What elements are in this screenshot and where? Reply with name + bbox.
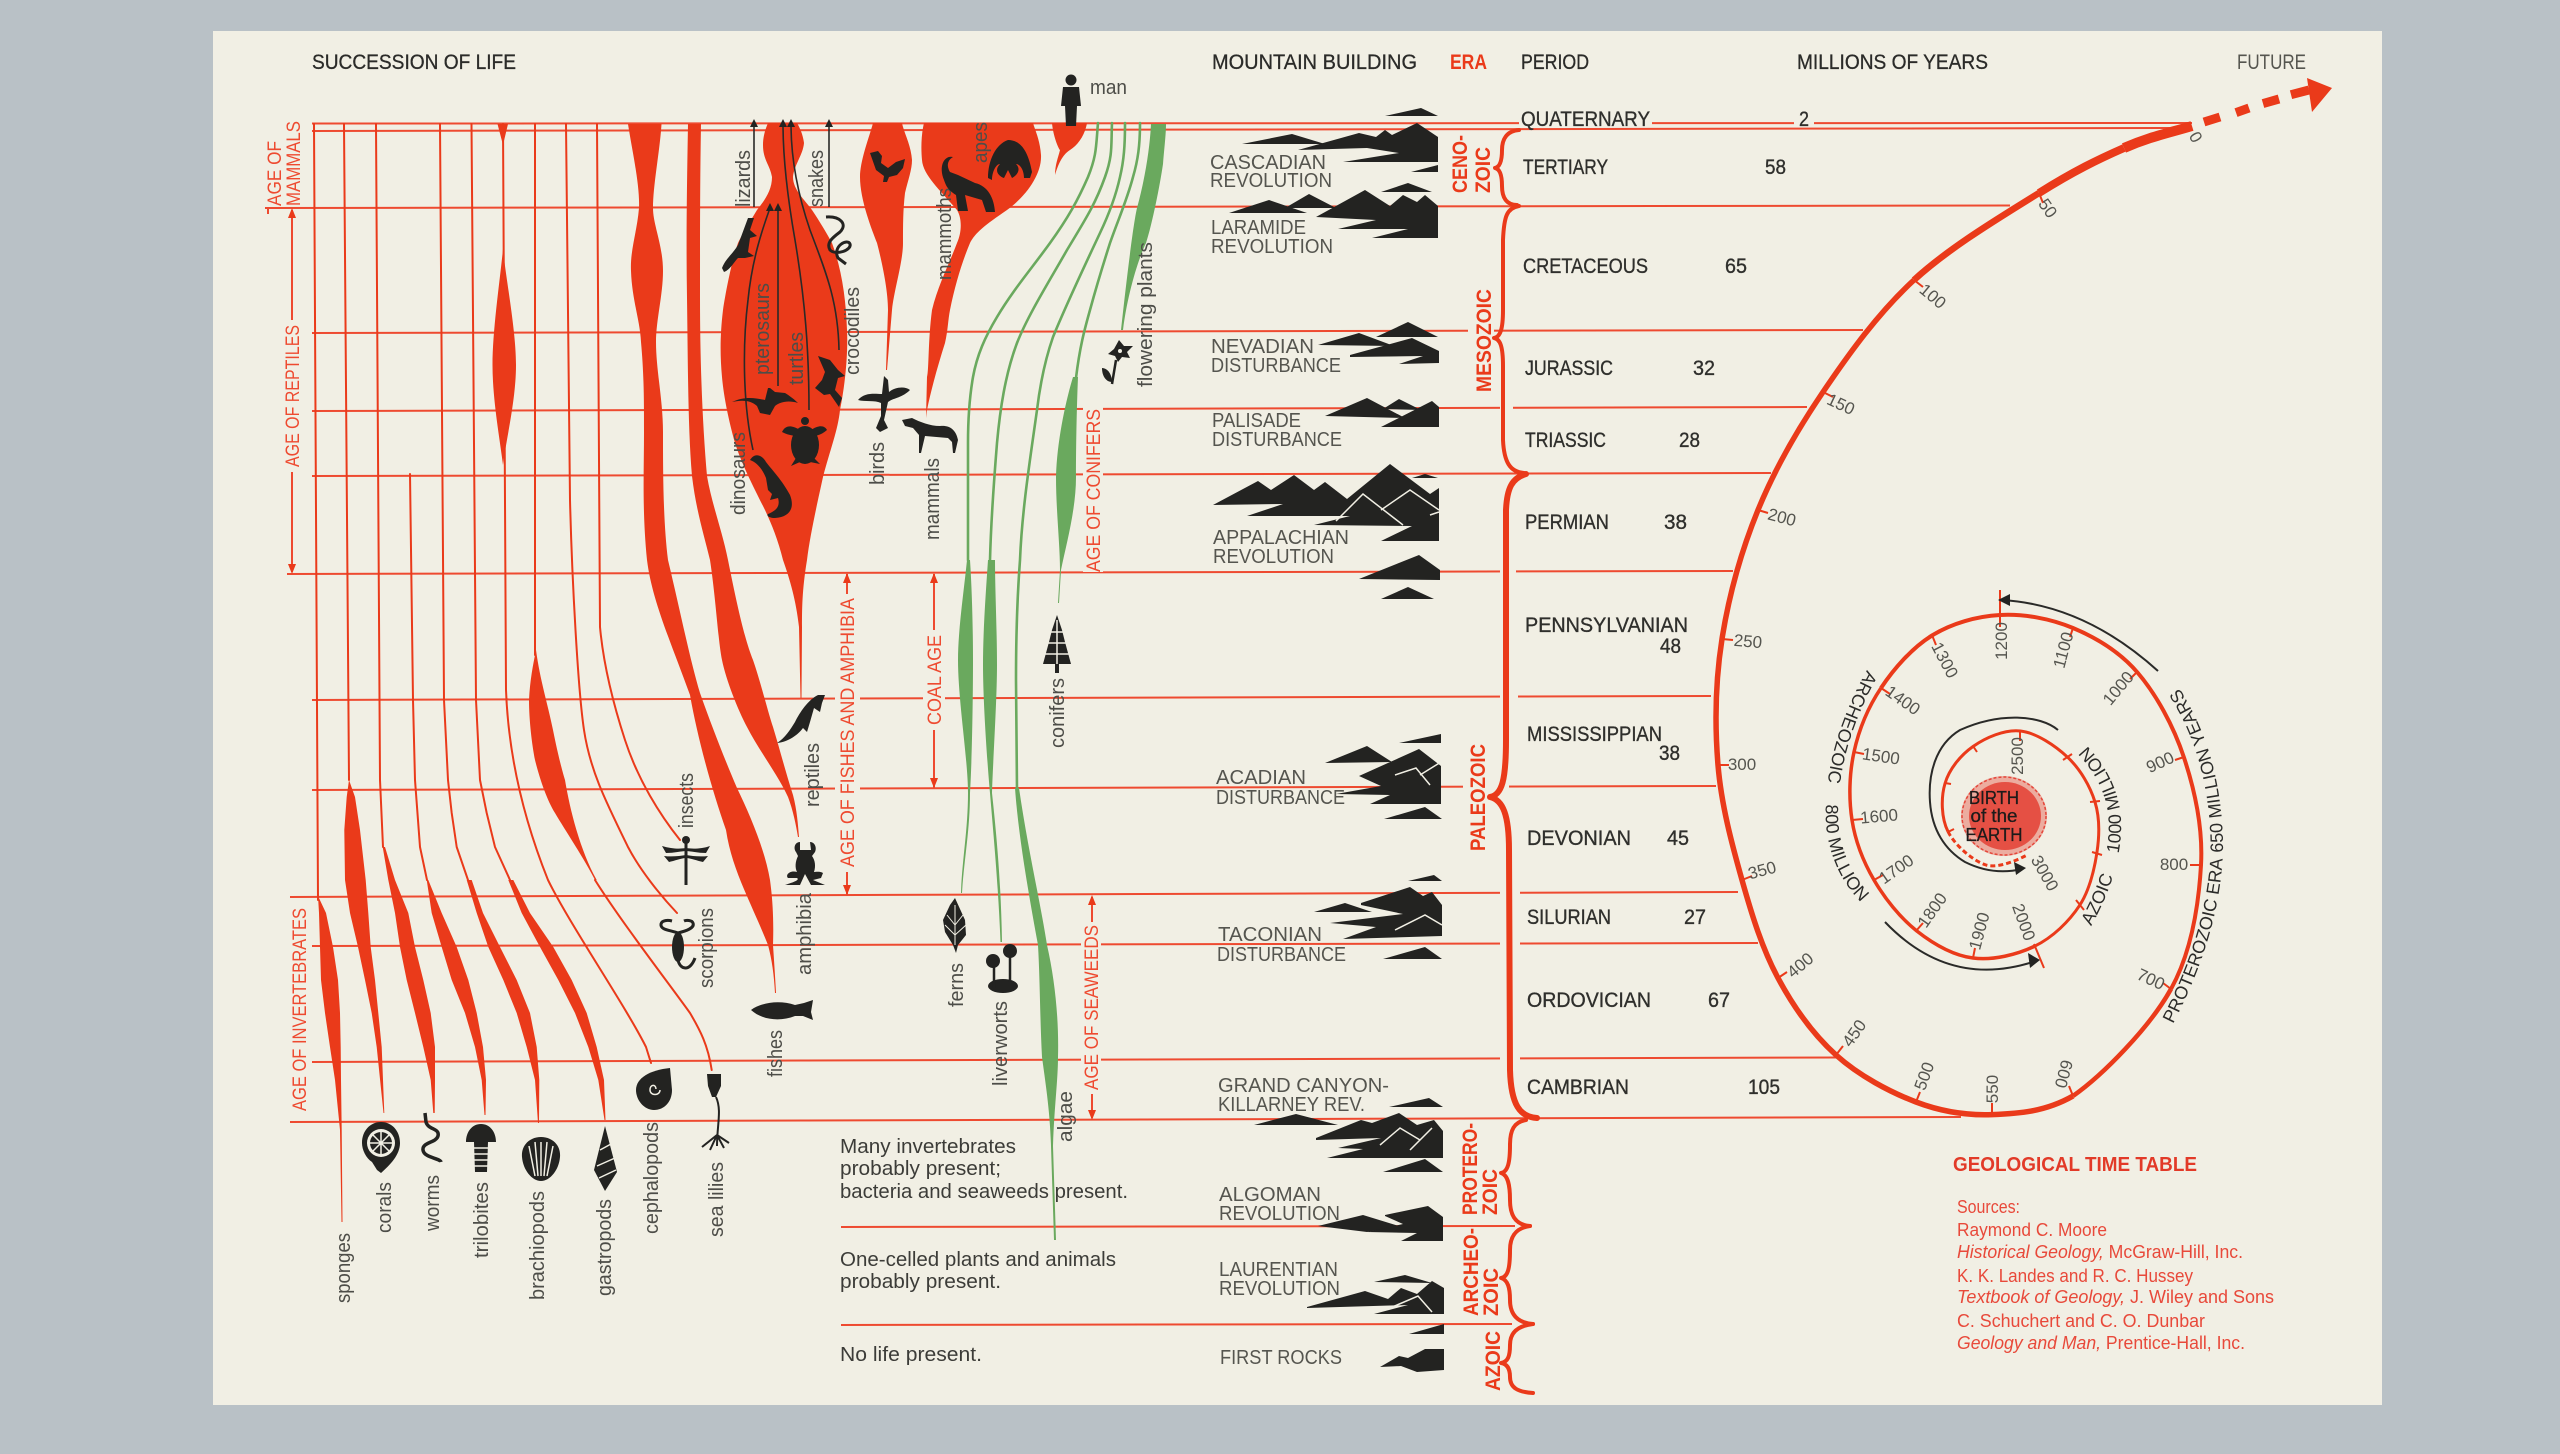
birth of the earth (1961, 776, 2047, 856)
era: cenozoic: ZOIC (1472, 147, 1495, 193)
mountains: first rocks (1380, 1349, 1444, 1372)
mountains: algoman revolution (1318, 1206, 1443, 1241)
label: nevadian (1211, 336, 1341, 377)
heading: future: FUTURE (2237, 51, 2306, 74)
strand: trilobites (410, 474, 486, 1115)
birth of the earth: BIRTH (1969, 788, 2019, 808)
icon: crocodile (815, 356, 845, 407)
source list: Sources: (1957, 1197, 2020, 1217)
era: proterozoic: PROTERO- (1459, 1123, 1482, 1215)
label: appalachian: APPALACHIAN (1213, 527, 1349, 549)
spiral tick marks (1718, 193, 2201, 1115)
notes on early life: probably present; (840, 1158, 1001, 1180)
heading: succession of life: SUCCESSION OF LIFE (312, 51, 516, 74)
curved label: 800 million: 800 MILLION (1826, 805, 1870, 902)
icon: turtle (782, 417, 827, 466)
icon: mammoth (942, 157, 995, 212)
source list: Raymond C. Moore (1957, 1220, 2107, 1240)
taxon labels: worms (422, 1175, 444, 1232)
era: archeozoic: ZOIC (1480, 1268, 1503, 1316)
taxon labels: amphibia (794, 892, 816, 975)
icon: gastropod (594, 1126, 617, 1191)
birth of the earth: of the (1970, 806, 2018, 826)
taxon labels: insects (676, 773, 698, 828)
panel: period table: JURASSIC (1525, 357, 1613, 380)
taxon labels: man (1090, 77, 1127, 99)
label: appalachian: REVOLUTION (1213, 546, 1334, 568)
spiral year numbers: 1600 (1859, 805, 1899, 828)
label: taconian: DISTURBANCE (1217, 944, 1346, 966)
age of fishes and amphibia: AGE OF FISHES AND AMPHIBIA (838, 598, 859, 867)
spiral year numbers: 1500 (1861, 744, 1901, 769)
label: laramide (1211, 217, 1333, 258)
green strand: flowering plants (1121, 124, 1166, 330)
age of mammals (265, 121, 305, 214)
spiral year numbers: 1200 (1992, 622, 2011, 660)
era: cenozoic: CENO- (1449, 135, 1472, 193)
spiral year numbers: 3000 (2027, 852, 2062, 894)
taxon labels: crocodiles (842, 287, 864, 375)
source list: C. Schuchert and C. O. Dunbar (1957, 1311, 2205, 1331)
icon: horse (902, 418, 958, 453)
strand: corals (344, 124, 384, 1113)
brace: proterozoic (1501, 1120, 1530, 1226)
era: mesozoic: MESOZOIC (1473, 289, 1496, 392)
reptile inner lines and arrows (744, 124, 839, 450)
label: acadian (1216, 767, 1345, 809)
coal age: COAL AGE (925, 635, 946, 725)
notes on early life: No life present. (840, 1344, 982, 1366)
strand: brachiopods (440, 124, 539, 1123)
source list (1957, 1197, 2274, 1353)
panel: period table: 58 (1765, 156, 1786, 179)
strand: gastropods (472, 124, 606, 1120)
strand: amphibia (687, 124, 799, 837)
taxon labels: snakes (806, 150, 828, 207)
panel: period table: PERMIAN (1525, 511, 1609, 534)
mountains: acadian disturbance (1325, 734, 1442, 819)
panel: period table: 27 (1684, 906, 1706, 929)
curved label: 650 million years: 650 MILLION YEARS (2170, 690, 2224, 852)
label: grand canyon (1218, 1075, 1389, 1116)
label: taconian (1217, 924, 1346, 966)
brace: archeozoic (1501, 1226, 1533, 1324)
taxon labels: lizards (733, 150, 755, 207)
taxon labels: sponges (333, 1233, 355, 1303)
label: laurentian: LAURENTIAN (1219, 1259, 1338, 1281)
mountains: appalachian revolution (1213, 464, 1440, 599)
taxon labels: scorpions (696, 908, 718, 988)
icon: fern (943, 898, 966, 953)
icon: flower (1102, 340, 1133, 384)
spiral year numbers: 600 (2051, 1058, 2076, 1090)
panel: period table: TERTIARY (1523, 156, 1608, 179)
spiral year numbers: 1900 (1965, 910, 1994, 952)
notes on early life: One-celled plants and animals (840, 1249, 1116, 1271)
column headings (312, 51, 2306, 74)
curved label: azoic: AZOIC (2082, 874, 2112, 926)
taxon labels: birds (867, 442, 889, 485)
taxon labels: mammals (922, 458, 944, 540)
label: laurentian: REVOLUTION (1219, 1278, 1340, 1300)
era: azoic: AZOIC (1482, 1331, 1505, 1391)
spiral year numbers: 200 (1766, 505, 1798, 530)
age labels and arrows (265, 121, 1105, 1120)
taxon labels: dinosaurs (728, 432, 750, 515)
era: archeozoic (1460, 1228, 1503, 1316)
brace: paleozoic (1490, 474, 1537, 1118)
taxon labels: ferns (946, 963, 968, 1007)
taxon labels: conifers (1047, 678, 1069, 748)
spiral year numbers: 900 (2143, 748, 2177, 777)
mountains: nevadian disturbance (1318, 322, 1439, 364)
icon: brachiopod (522, 1137, 560, 1181)
icon: trilobite (466, 1124, 496, 1172)
era: proterozoic: ZOIC (1479, 1169, 1502, 1215)
icon: sea lily (702, 1074, 729, 1150)
panel: period table: TRIASSIC (1525, 429, 1606, 452)
label: laramide: LARAMIDE (1211, 217, 1306, 239)
source list: Geology and Man, Prentice-Hall, Inc. (1957, 1333, 2245, 1353)
brace: mesozoic (1494, 206, 1524, 473)
age of seaweeds: AGE OF SEAWEEDS (1082, 925, 1103, 1090)
mountains: laurentian revolution (1307, 1275, 1444, 1334)
icon: cephalopod (636, 1068, 672, 1110)
spiral year numbers: 500 (1911, 1060, 1938, 1093)
icon: liverwort palms (986, 944, 1018, 993)
panel: period table: ORDOVICIAN (1527, 989, 1651, 1012)
mountains: palisade disturbance (1325, 398, 1439, 427)
panel: era labels (1449, 130, 1537, 1393)
source list: Textbook of Geology, J. Wiley and Sons (1957, 1287, 2274, 1307)
green strand: algae (1015, 123, 1125, 1240)
notes on early life: Many invertebrates (840, 1136, 1016, 1158)
spiral year numbers: 450 (1838, 1016, 1870, 1050)
curved label: 1000 million: 1000 MILLION (2078, 746, 2122, 852)
green strand: conifers (1056, 123, 1140, 603)
panel: animal and plant icons (362, 74, 1133, 1191)
taxon labels: cephalopods (641, 1122, 663, 1234)
panel: period table: 28 (1679, 429, 1700, 452)
birth of the earth: EARTH (1966, 825, 2022, 845)
label: palisade (1212, 410, 1342, 451)
notes on early life: bacteria and seaweeds present. (840, 1181, 1128, 1203)
age of invertebrates: AGE OF INVERTEBRATES (290, 908, 311, 1111)
panel: period table: 38 (1664, 511, 1687, 534)
label: taconian: TACONIAN (1218, 924, 1322, 946)
mountains: cascadian revolution (1242, 108, 1438, 172)
spiral year numbers: 0 (2185, 128, 2206, 146)
panel: period table: CRETACEOUS (1523, 255, 1648, 278)
era: paleozoic: PALEOZOIC (1467, 744, 1490, 851)
icon: reptile (777, 695, 825, 743)
spiral year numbers: 1300 (1927, 639, 1962, 681)
spiral year numbers: 700 (2134, 965, 2168, 994)
taxon labels: brachiopods (527, 1191, 549, 1300)
black arrow: archeozoic span (1885, 922, 2040, 970)
sources block (1953, 1154, 2274, 1353)
brace: azoic (1501, 1324, 1533, 1393)
brace: cenozoic (1495, 130, 1519, 205)
curved label: proterozoic era: PROTEROZOIC ERA (2162, 858, 2223, 1023)
title: geological time table: GEOLOGICAL TIME TABLE (1953, 1154, 2197, 1176)
spiral year numbers: 800 (2160, 855, 2188, 874)
era: archeozoic: ARCHEO- (1460, 1228, 1483, 1316)
notes on early life (840, 1136, 1128, 1366)
label: first rocks: FIRST ROCKS (1220, 1347, 1342, 1369)
panel: period table: CAMBRIAN (1527, 1076, 1629, 1099)
label: acadian: DISTURBANCE (1216, 787, 1345, 809)
spiral year numbers: 400 (1783, 949, 1817, 982)
icon: frog (785, 842, 825, 885)
label: palisade: PALISADE (1212, 410, 1301, 432)
taxon labels: mammoths (934, 188, 956, 280)
spiral year numbers: 100 (1916, 280, 1950, 313)
taxon labels: liverworts (990, 1001, 1012, 1086)
green strand: liverworts (983, 123, 1112, 942)
spiral year numbers: 2000 (2008, 901, 2039, 943)
mountains: grand canyon-killarney (1254, 1098, 1443, 1172)
label: palisade: DISTURBANCE (1212, 429, 1342, 451)
heading: era: ERA (1450, 51, 1487, 74)
icon: conifer (1043, 615, 1071, 673)
panel: period table: 38 (1659, 742, 1680, 765)
strand: sponges (314, 124, 342, 1222)
age of mammals: AGE OF (265, 141, 286, 206)
panel: period table: 105 (1748, 1076, 1780, 1099)
source list: Historical Geology, McGraw-Hill, Inc. (1957, 1242, 2243, 1262)
spiral year numbers: 150 (1824, 390, 1858, 419)
panel: period table: 48 (1660, 635, 1681, 658)
taxon labels: algae (1055, 1091, 1077, 1142)
spiral year numbers: 1400 (1882, 682, 1924, 719)
spiral year numbers: 300 (1728, 755, 1756, 774)
panel: period table: DEVONIAN (1527, 827, 1631, 850)
icon: bird (858, 376, 910, 432)
taxon labels: gastropods (594, 1199, 616, 1296)
age of reptiles (283, 208, 304, 574)
strand: man (1052, 123, 1087, 175)
mountains: laramide revolution (1229, 183, 1438, 238)
masks breaking lines behind labels (835, 112, 1814, 1092)
strand: reptiles (721, 123, 847, 698)
spiral year numbers: 1000 (2099, 668, 2138, 709)
coal age (925, 573, 946, 788)
panel: period table: 2 (1799, 108, 1809, 131)
age of reptiles: AGE OF REPTILES (283, 325, 304, 467)
strand: mammals (921, 123, 1041, 418)
icon: coral (362, 1122, 400, 1173)
curved label: archeozoic: ARCHEOZOIC (1828, 670, 1876, 784)
mountains: taconian disturbance (1314, 875, 1442, 959)
label: grand canyon: GRAND CANYON- (1218, 1075, 1389, 1097)
label: algoman: ALGOMAN (1219, 1184, 1321, 1206)
icon: pterosaur (732, 388, 798, 415)
taxon labels (333, 77, 1157, 1303)
panel: period table: SILURIAN (1527, 906, 1611, 929)
taxon labels: pterosaurs (752, 283, 774, 375)
label: cascadian: REVOLUTION (1210, 170, 1332, 192)
label: appalachian (1213, 527, 1349, 568)
spiral year numbers: 1100 (2050, 630, 2077, 670)
icon: dinosaur (750, 455, 792, 518)
spiral year numbers: 350 (1746, 858, 1778, 883)
panel: period table: 65 (1725, 255, 1747, 278)
panel: succession of life strands (314, 119, 1166, 1240)
label: cascadian (1210, 152, 1332, 192)
panel: time spiral (1713, 78, 2332, 1118)
spiral: outer thick band (1716, 126, 2201, 1115)
strand: sea lilies (529, 124, 712, 1070)
strand: birds (860, 123, 912, 370)
strand: insects (597, 124, 680, 840)
spiral year numbers: 50 (2034, 195, 2061, 221)
black arrow: azoic span (1930, 718, 2058, 875)
panel: period table: MISSISSIPPIAN (1527, 723, 1662, 746)
spiral year numbers: 250 (1733, 631, 1763, 652)
icon: man (1061, 74, 1081, 126)
taxon labels: flowering plants (1135, 242, 1157, 387)
heading: millions of years: MILLIONS OF YEARS (1797, 51, 1988, 74)
label: grand canyon: KILLARNEY REV. (1218, 1094, 1365, 1116)
icon: fish (751, 1000, 813, 1020)
label: acadian: ACADIAN (1216, 767, 1306, 789)
label: laurentian (1219, 1259, 1340, 1300)
taxon labels: sea lilies (706, 1162, 728, 1237)
heading: mountain building: MOUNTAIN BUILDING (1212, 51, 1417, 74)
spiral year numbers: 1800 (1914, 889, 1951, 931)
notes on early life: probably present. (840, 1271, 1001, 1293)
taxon labels: reptiles (802, 743, 824, 807)
green strand: ferns (958, 123, 1098, 893)
age of conifers: AGE OF CONIFERS (1084, 409, 1105, 572)
spiral year numbers (1728, 128, 2206, 1103)
icon: lizard (722, 218, 757, 272)
spiral year numbers: 2500 (2008, 737, 2027, 775)
strand: scorpions (566, 124, 677, 913)
label: cascadian: CASCADIAN (1210, 152, 1326, 174)
strand: fishes (628, 124, 776, 993)
icon: worm (423, 1113, 441, 1162)
label: algoman: REVOLUTION (1219, 1203, 1340, 1225)
era: proterozoic (1459, 1123, 1502, 1215)
horizontal period lines (265, 123, 2192, 1325)
spiral year numbers: 1700 (1875, 851, 1917, 888)
age of mammals: MAMMALS (284, 121, 305, 206)
strand: worms (376, 124, 435, 1113)
future arrow (2204, 78, 2332, 122)
panel: mountain building (1210, 108, 1444, 1372)
taxon labels: turtles (786, 332, 808, 385)
heading: period: PERIOD (1521, 51, 1589, 74)
source list: K. K. Landes and R. C. Hussey (1957, 1266, 2193, 1286)
taxon labels: fishes (765, 1030, 787, 1077)
label: nevadian: DISTURBANCE (1211, 355, 1341, 377)
taxon labels: apes (970, 122, 992, 163)
icon: dragonfly (662, 836, 710, 885)
spiral year numbers: 550 (1983, 1075, 2002, 1103)
label: laramide: REVOLUTION (1211, 236, 1333, 258)
panel: period table: QUATERNARY (1521, 108, 1650, 131)
label: algoman (1219, 1184, 1340, 1225)
icon: snake (826, 217, 850, 264)
icon: scorpion (661, 920, 695, 968)
taxon labels: trilobites (471, 1182, 493, 1258)
panel: period table (1521, 108, 1809, 1099)
taxon labels: corals (374, 1182, 396, 1233)
label: nevadian: NEVADIAN (1211, 336, 1314, 358)
icon: rooster (870, 151, 905, 182)
panel: period table: 67 (1708, 989, 1730, 1012)
black arrow: proterozoic span (1998, 594, 2158, 671)
panel: period table: 45 (1667, 827, 1689, 850)
era: cenozoic (1449, 135, 1495, 193)
panel: period table: PENNSYLVANIAN (1525, 614, 1688, 637)
panel: period table: 32 (1693, 357, 1715, 380)
strand: cephalopods (492, 124, 651, 1063)
icon: ape (988, 140, 1032, 180)
